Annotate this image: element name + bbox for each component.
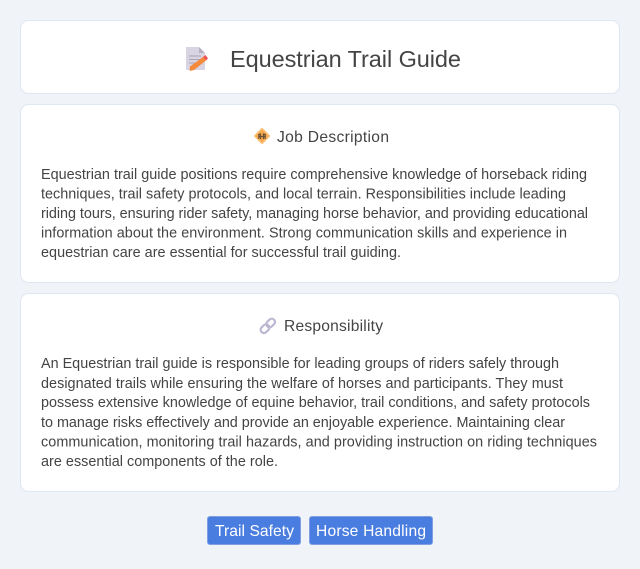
text block: job description: Equestrian trail guide positions require comprehensive knowledge of horseback riding: [41, 167, 587, 183]
text block: job description: equestrian care are essential for successful trail guiding.: [41, 245, 401, 261]
text block: job description: riding tours, ensuring rider safety, managing horse behavior, and providing educational: [41, 206, 588, 222]
panel: job description: [20, 104, 620, 282]
text block: job description: information about the environment. Strong communication skills and experience in: [41, 226, 567, 242]
tag: horse handling: Horse Handling: [316, 523, 426, 540]
text block: responsibility: to manage risks effectively and provide an enjoyable experience. Maintaining clear: [41, 415, 565, 431]
icon: orange diamond sign: [254, 128, 270, 144]
text block: responsibility: [41, 356, 597, 470]
icon: chain link: [259, 317, 276, 334]
tag: trail safety: Trail Safety: [215, 523, 294, 540]
text block: responsibility: communication, monitoring trail hazards, and providing instruction on riding techniques: [41, 434, 597, 450]
heading: page title: Equestrian Trail Guide: [230, 46, 461, 72]
heading: job description: Job Description: [277, 129, 389, 146]
text block: job description: techniques, trail safety protocols, and local terrain. Responsibilities include leading: [41, 186, 566, 202]
tag: horse handling: [310, 516, 432, 544]
text block: responsibility: possess extensive knowledge of equine behavior, trail conditions, and safety protocols: [41, 395, 590, 411]
text block: responsibility: are essential components of the role.: [41, 454, 278, 470]
panel: responsibility: [20, 294, 620, 492]
icon: document with pencil: [186, 47, 208, 71]
tag: trail safety: [208, 516, 300, 544]
heading: responsibility: Responsibility: [284, 318, 383, 335]
text block: responsibility: An Equestrian trail guide is responsible for leading groups of riders safely through: [41, 356, 559, 372]
text block: job description: [41, 167, 588, 261]
text block: responsibility: designated trails while ensuring the welfare of horses and participants. They must: [41, 376, 563, 392]
panel: title: [20, 20, 620, 94]
